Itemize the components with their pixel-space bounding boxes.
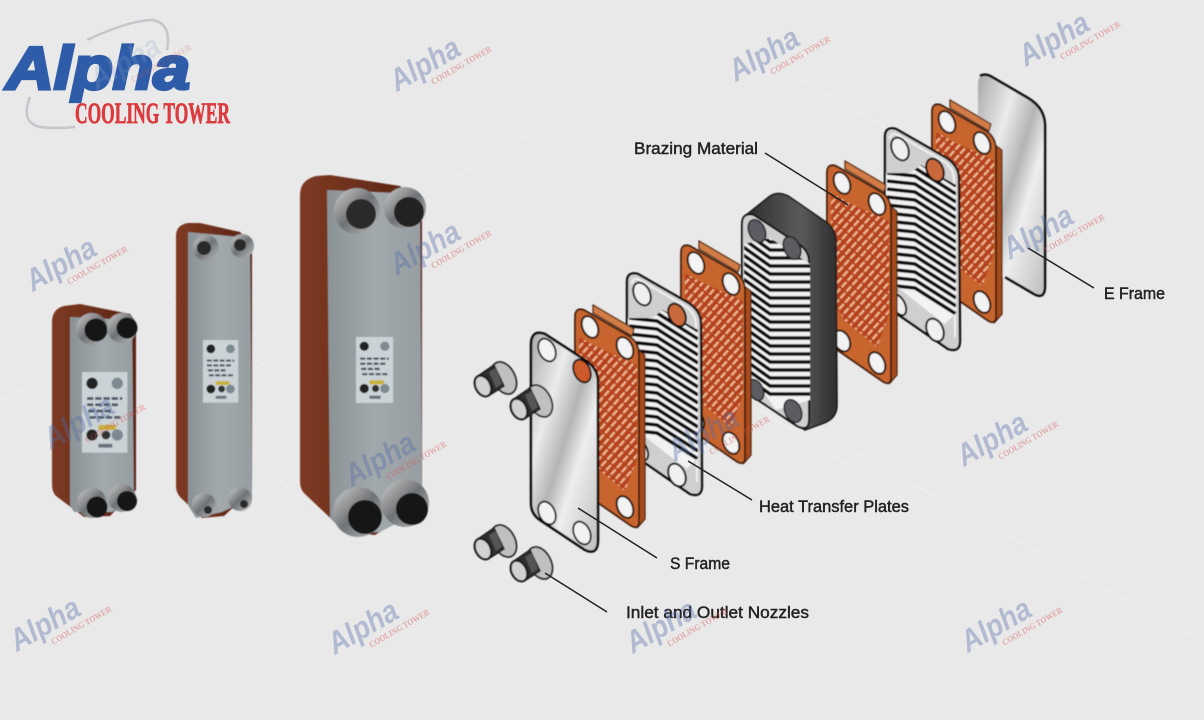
exploded view of plate stack [471, 75, 1045, 584]
watermark [660, 386, 772, 475]
product: large heat exchanger [300, 175, 429, 537]
watermark: COOLING TOWER [83, 402, 148, 445]
watermark: COOLING TOWER [429, 228, 494, 271]
leader lines [545, 153, 1094, 612]
faint background streaks [0, 80, 1200, 640]
watermark [995, 184, 1107, 273]
S frame [531, 333, 598, 552]
product: small heat exchanger [52, 304, 138, 518]
label: S Frame: S Frame [670, 554, 730, 573]
watermark: COOLING TOWER [996, 419, 1061, 462]
product: medium heat exchanger [176, 223, 254, 518]
watermark: Alpha [2, 590, 86, 659]
E frame [978, 75, 1045, 296]
brazing sheet 3 [827, 161, 897, 383]
watermark: Alpha [337, 425, 421, 494]
watermark: COOLING TOWER [65, 244, 130, 287]
watermark: Alpha [382, 214, 466, 283]
logo [4, 20, 230, 130]
logo swoosh [27, 20, 168, 128]
watermark [82, 14, 194, 103]
watermark: Alpha [949, 405, 1033, 474]
watermark: Alpha [660, 400, 744, 469]
watermark [953, 577, 1065, 666]
watermark: COOLING TOWER [665, 606, 730, 649]
watermark: Alpha [1011, 5, 1095, 74]
logo wordmark: Alpha [4, 35, 190, 102]
brazing sheet 4 [932, 100, 1002, 322]
label: Heat Transfer Plates: Heat Transfer Plates [759, 497, 909, 516]
watermark [337, 411, 449, 500]
watermark: COOLING TOWER [768, 34, 833, 77]
label: E Frame: E Frame [1104, 284, 1165, 303]
watermark: Alpha [721, 20, 805, 89]
brazing sheet 2 [681, 241, 751, 463]
watermark: Alpha [382, 30, 466, 99]
watermark: COOLING TOWER [1042, 212, 1107, 255]
watermark: COOLING TOWER [1000, 605, 1065, 648]
label: Brazing Material: Brazing Material [634, 139, 758, 158]
watermark [2, 576, 114, 665]
watermark: COOLING TOWER [129, 42, 194, 85]
watermark: Alpha [995, 198, 1079, 267]
logo subtitle: COOLING TOWER [75, 97, 230, 130]
watermark: COOLING TOWER [1058, 19, 1123, 62]
watermark [18, 216, 130, 305]
watermark [36, 374, 148, 463]
watermark: Alpha [82, 28, 166, 97]
watermark [320, 579, 432, 668]
watermark: Alpha [953, 591, 1037, 660]
brazing sheet 1 [575, 305, 645, 527]
label: Inlet and Outlet Nozzles: Inlet and Outlet Nozzles [626, 603, 809, 622]
assembled plate pack [742, 194, 837, 430]
watermark [382, 16, 494, 105]
watermark: Alpha [36, 388, 120, 457]
watermark: Alpha [18, 230, 102, 299]
watermark [721, 6, 833, 95]
watermark: Alpha [618, 592, 702, 661]
heat transfer plate, rear [885, 128, 960, 350]
watermark: COOLING TOWER [367, 607, 432, 650]
watermark [618, 578, 730, 667]
inlet and outlet nozzles [471, 358, 558, 584]
watermark: COOLING TOWER [707, 414, 772, 457]
watermark [382, 200, 494, 289]
watermark: COOLING TOWER [384, 439, 449, 482]
watermark: COOLING TOWER [429, 44, 494, 87]
watermark [949, 391, 1061, 480]
watermark: COOLING TOWER [49, 604, 114, 647]
watermark: Alpha [320, 593, 404, 662]
heat transfer plate, front [627, 273, 702, 495]
